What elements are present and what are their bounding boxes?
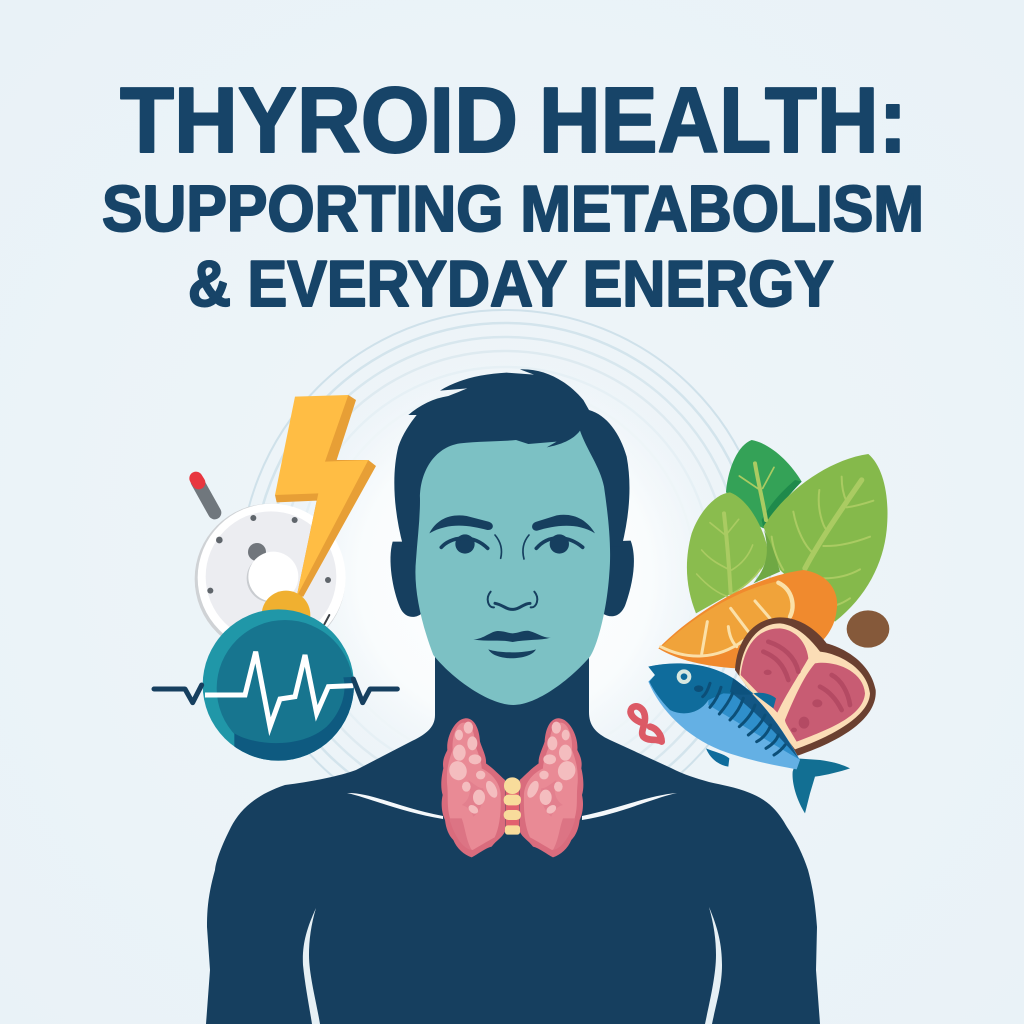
leaves: [687, 440, 888, 622]
gauge dial: [195, 478, 346, 654]
head and face: [391, 369, 634, 705]
title: & EVERYDAY ENERGY: [188, 247, 834, 320]
steak: [735, 617, 876, 756]
radiating rings background: [240, 310, 770, 840]
title: SUPPORTING METABOLISM: [102, 172, 924, 245]
pulse line right: [353, 679, 397, 703]
red squiggle: [631, 706, 662, 742]
left lobe: [441, 718, 505, 857]
pulse line inner: [205, 652, 353, 727]
orange slice: [658, 570, 837, 668]
trachea: [504, 777, 521, 835]
person torso and neck: [206, 650, 820, 1024]
brown nut: [847, 610, 889, 648]
lightning bolt: [275, 395, 376, 597]
thyroid gland: [441, 718, 583, 857]
right lobe: [520, 718, 583, 857]
energy gauge and heart-rate icon group: [154, 395, 397, 767]
face: [415, 431, 610, 705]
dome base: [262, 591, 310, 639]
food group: [631, 440, 889, 813]
hair: [394, 369, 629, 547]
collarbone lines: [347, 793, 677, 820]
title: THYROID: [120, 68, 518, 172]
facial features: [429, 515, 595, 658]
ears: [391, 541, 634, 617]
fish: [648, 663, 850, 813]
title: [102, 68, 924, 320]
pulse line left: [154, 685, 202, 703]
arm lines: [303, 907, 722, 1024]
title: HEALTH:: [539, 68, 907, 172]
heart-rate coin: [203, 609, 360, 767]
